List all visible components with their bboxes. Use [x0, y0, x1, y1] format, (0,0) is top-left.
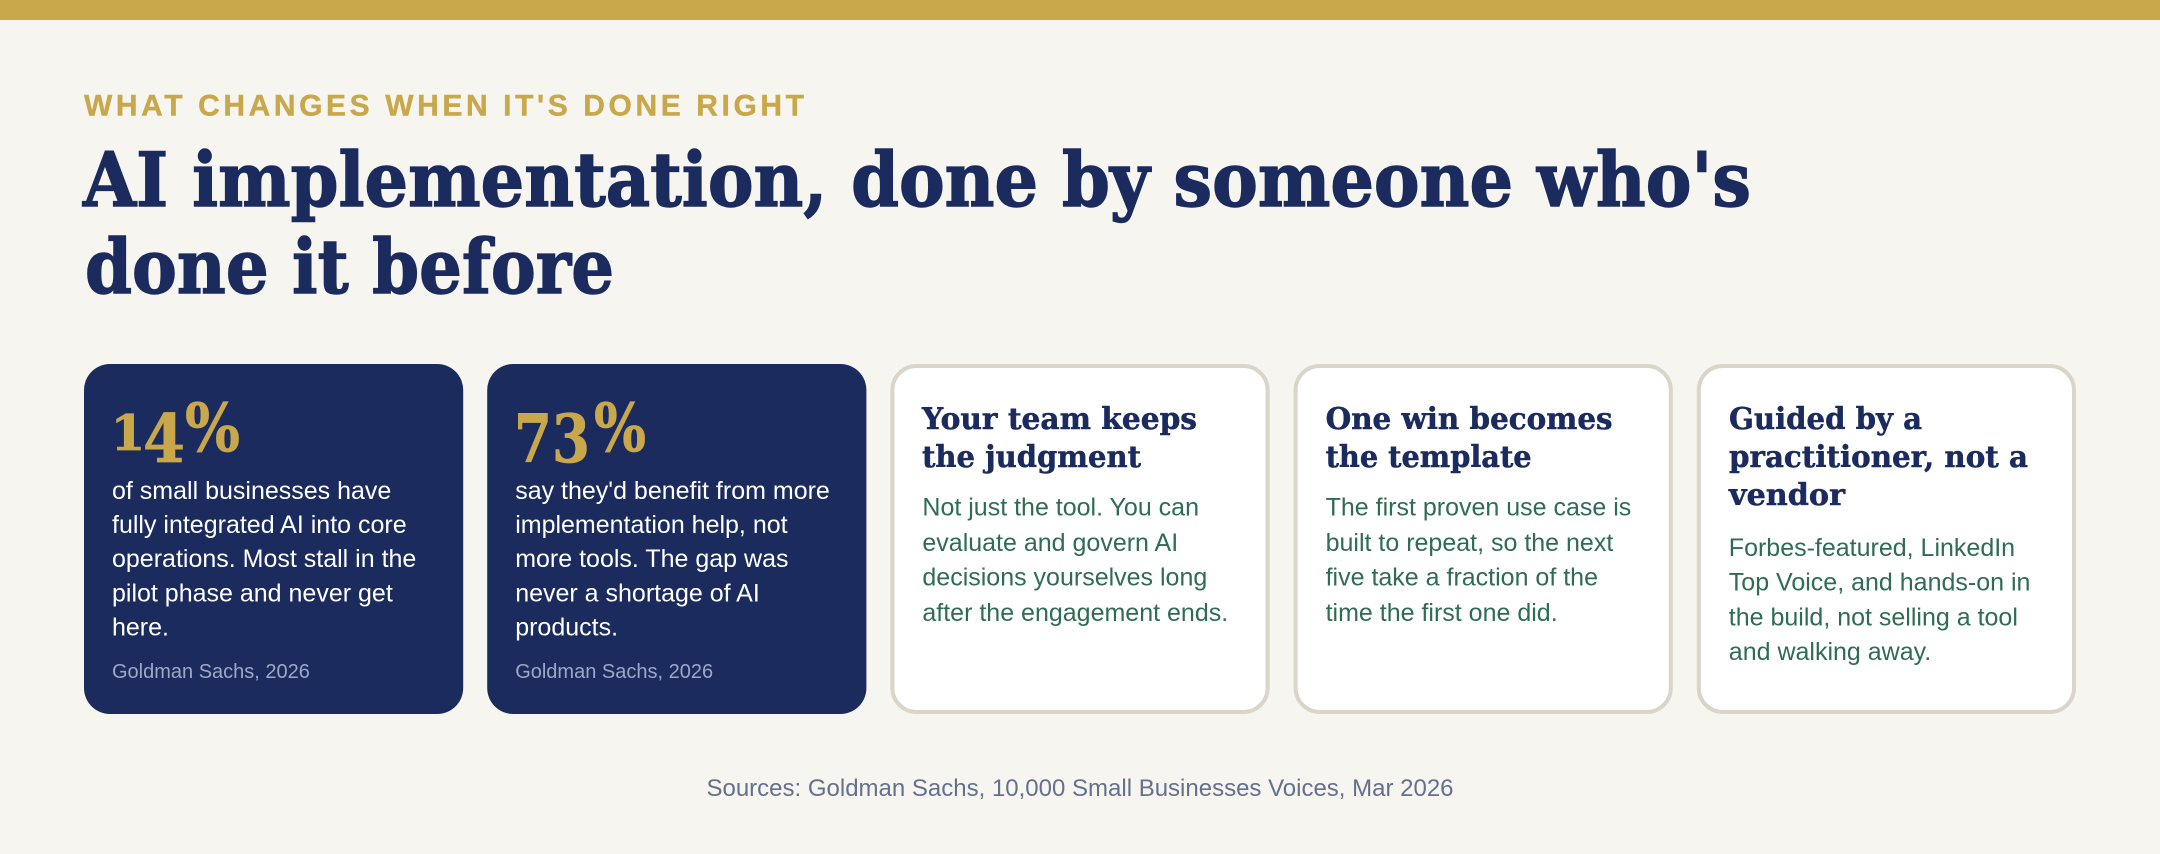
- card body: Top Voice, and hands-on in: [1729, 568, 2030, 596]
- card body: [1326, 494, 1631, 627]
- stat number: 14%: %: [185, 389, 240, 467]
- stat source: Goldman Sachs, 2026: [112, 661, 310, 683]
- card body: after the engagement ends.: [922, 599, 1228, 627]
- top accent bar: [0, 0, 2160, 20]
- stat description: products.: [515, 614, 618, 642]
- panel: 14% stat card: [84, 364, 463, 714]
- card body: decisions yourselves long: [922, 564, 1207, 592]
- card heading: One win becomes: [1326, 402, 1613, 437]
- card body: Forbes-featured, LinkedIn: [1729, 534, 2015, 562]
- card heading: [921, 402, 1197, 475]
- title: [82, 136, 1751, 311]
- stat description: pilot phase and never get: [112, 580, 393, 608]
- panel: one win becomes the template: [1296, 366, 1671, 712]
- stat number: 14%: 4: [143, 400, 185, 478]
- footer sources note: Sources: Goldman Sachs, 10,000 Small Businesses Voices, Mar 2026: [706, 775, 1454, 802]
- card heading: [1728, 402, 2028, 513]
- stat description: of small businesses have: [112, 477, 391, 505]
- card heading: [1326, 402, 1613, 475]
- stat number: 14%: 1: [110, 404, 146, 462]
- card body: Not just the tool. You can: [922, 494, 1199, 522]
- stat description: [112, 477, 416, 642]
- stat description: fully integrated AI into core: [112, 511, 407, 539]
- card body: time the first one did.: [1326, 599, 1558, 627]
- stat description: never a shortage of AI: [515, 580, 760, 608]
- card body: The first proven use case is: [1326, 494, 1631, 522]
- stat description: operations. Most stall in the: [112, 545, 416, 573]
- card heading: vendor: [1728, 478, 1846, 513]
- panel: your team keeps the judgment: [892, 366, 1268, 712]
- card heading: Guided by a: [1729, 402, 1922, 437]
- card body: five take a fraction of the: [1326, 564, 1598, 592]
- title: AI implementation, done by someone who's: [82, 136, 1751, 224]
- card body: [922, 494, 1228, 627]
- card heading: the judgment: [922, 440, 1141, 475]
- stat description: here.: [112, 614, 169, 642]
- stat number: 73%: %: [594, 389, 646, 467]
- eyebrow heading: WHAT CHANGES WHEN IT'S DONE RIGHT: [84, 90, 804, 122]
- stat description: [515, 477, 830, 642]
- card heading: practitioner, not a: [1729, 440, 2028, 475]
- card body: and walking away.: [1729, 638, 1931, 666]
- title: done it before: [85, 223, 614, 311]
- card heading: Your team keeps: [921, 402, 1197, 437]
- panel: guided by a practitioner: [1699, 366, 2074, 712]
- card heading: the template: [1326, 440, 1532, 475]
- stat description: say they'd benefit from more: [515, 477, 830, 505]
- card body: [1729, 534, 2030, 666]
- card body: built to repeat, so the next: [1326, 529, 1613, 557]
- panel: 73% stat card: [487, 364, 866, 714]
- stat description: implementation help, not: [515, 511, 788, 539]
- stat number: 73%: 7: [514, 400, 552, 478]
- card body: the build, not selling a tool: [1729, 604, 2018, 632]
- card body: evaluate and govern AI: [922, 529, 1178, 557]
- stat description: more tools. The gap was: [515, 545, 788, 573]
- stat number: 73%: 3: [552, 400, 590, 478]
- stat source: Goldman Sachs, 2026: [515, 661, 713, 683]
